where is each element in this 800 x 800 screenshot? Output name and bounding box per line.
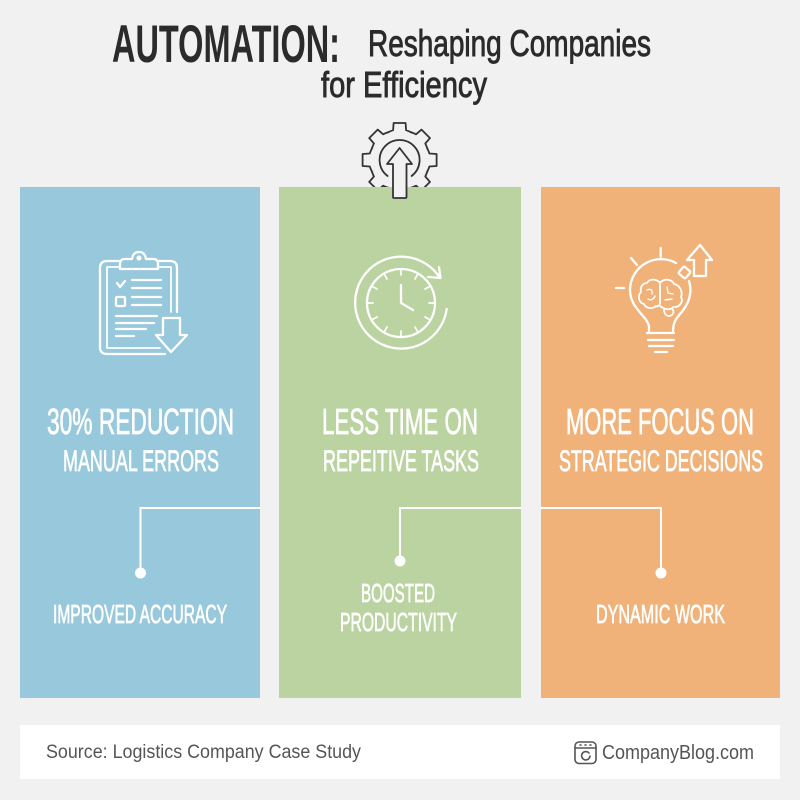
icon: gear outline [363,123,437,197]
icon: light bulb with brain [616,245,712,352]
heading: less time on: LESS TIME ON [322,401,478,442]
subheading: manual errors: MANUAL ERRORS [63,445,219,478]
connector: productivity [394,508,521,566]
website text: CompanyBlog.com [602,742,754,764]
footer bar [20,725,780,779]
icon: blog logo [575,742,596,764]
panel: strategic decisions [541,187,780,698]
title [112,15,651,105]
icon: gear arrow [387,148,412,198]
title: AUTOMATION: [112,15,340,74]
connector: accuracy [135,508,260,578]
label: boosted productivity: BOOSTED [361,578,435,608]
connector: dynamic work [541,508,666,578]
label: boosted productivity [340,578,457,637]
subheading: repetitive tasks: REPEITIVE TASKS [323,445,479,478]
label: improved accuracy: IMPROVED ACCURACY [53,599,227,629]
icon: clipboard with down arrow [100,252,187,354]
panel: manual errors [20,187,260,698]
label: dynamic work: DYNAMIC WORK [596,599,725,629]
source text: Source: Logistics Company Case Study [46,742,361,763]
label: boosted productivity: PRODUCTIVITY [340,607,457,637]
title: Reshaping Companies [368,23,651,64]
title: for Efficiency [321,64,487,105]
heading: 30% reduction: 30% REDUCTION [47,401,234,442]
panel: repetitive tasks [279,187,521,698]
icon: clock with circular arrow [355,257,447,349]
